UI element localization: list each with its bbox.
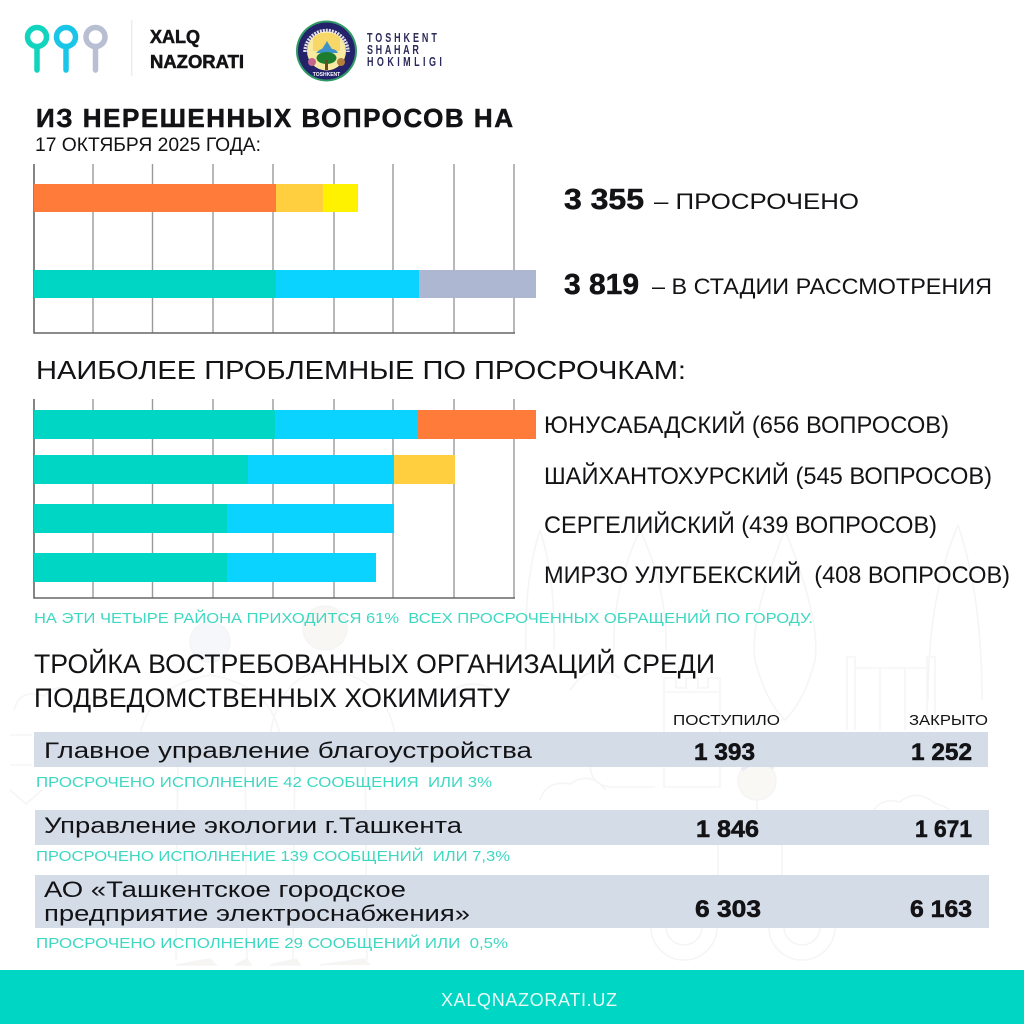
title <box>35 103 513 156</box>
city administration name: HOKIMLIGI <box>367 56 442 69</box>
district labels: ЮНУСАБАДСКИЙ (656 ВОПРОСОВ) <box>544 411 949 439</box>
district labels <box>544 411 1010 589</box>
brand name: NAZORATI <box>150 52 244 72</box>
background illustration <box>10 525 982 965</box>
bar: Mirzo Ulugbek <box>34 553 376 582</box>
title: ИЗ НЕРЕШЕННЫХ ВОПРОСОВ НА <box>36 103 513 133</box>
overdue note: row 3: ПРОСРОЧЕНО ИСПОЛНЕНИЕ 29 СООБЩЕНИЙ ИЛИ 0,5% <box>36 934 508 952</box>
table row: power supply enterprise <box>35 875 989 928</box>
bar: under review <box>34 270 536 298</box>
table column headers <box>673 712 988 729</box>
table row: ecology department: 1 846 <box>696 816 759 843</box>
heading: top three organizations <box>34 648 715 713</box>
table row: improvement department: Главное управление благоустройства <box>44 738 533 763</box>
bar: Sergeli <box>34 504 394 533</box>
district labels: МИРЗО УЛУГБЕКСКИЙ (408 ВОПРОСОВ) <box>544 561 1010 589</box>
city administration name: SHAHAR <box>367 44 419 57</box>
footer band <box>0 970 1024 1024</box>
footer band: XALQNAZORATI.UZ <box>441 990 617 1010</box>
heading: most problematic: НАИБОЛЕЕ ПРОБЛЕМНЫЕ ПО ПРОСРОЧКАМ: <box>36 355 686 385</box>
icon: grey magnifier <box>86 28 105 70</box>
under review total: 3 819 <box>564 269 639 301</box>
heading: top three organizations: ТРОЙКА ВОСТРЕБОВАННЫХ ОРГАНИЗАЦИЙ СРЕДИ <box>34 648 715 679</box>
table column headers: ЗАКРЫТО <box>909 712 988 729</box>
chart: overdue vs under review <box>34 164 536 333</box>
icon: blue magnifier <box>56 28 76 70</box>
table column headers: ПОСТУПИЛО <box>673 712 780 729</box>
overdue total <box>564 184 859 216</box>
city administration name <box>367 32 442 69</box>
under review total: – В СТАДИИ РАССМОТРЕНИЯ <box>652 274 992 299</box>
under review total <box>564 269 992 301</box>
bar: Yunusabad <box>34 410 536 439</box>
emblem: TOSHKENT <box>313 72 340 78</box>
chart: districts <box>34 399 536 598</box>
district labels: СЕРГЕЛИЙСКИЙ (439 ВОПРОСОВ) <box>544 511 937 539</box>
heading: top three organizations: ПОДВЕДОМСТВЕННЫХ ХОКИМИЯТУ <box>34 683 511 713</box>
brand name <box>150 27 244 72</box>
note: four districts share: НА ЭТИ ЧЕТЫРЕ РАЙОНА ПРИХОДИТСЯ 61% ВСЕХ ПРОСРОЧЕННЫХ ОБРАЩЕНИЙ ПО ГОРОДУ. <box>34 609 813 627</box>
table row: improvement department <box>34 732 988 767</box>
table row: ecology department: Управление экологии г.Ташкента <box>44 813 463 838</box>
table row: power supply enterprise: предприятие электроснабжения» <box>44 901 470 926</box>
overdue total: – ПРОСРОЧЕНО <box>654 189 859 214</box>
table row: ecology department: 1 671 <box>915 816 972 843</box>
table row: power supply enterprise: АО «Ташкентское городское <box>44 877 406 902</box>
table row: improvement department: 1 393 <box>694 739 755 766</box>
table row: improvement department: 1 252 <box>911 739 972 766</box>
district labels: ШАЙХАНТОХУРСКИЙ (545 ВОПРОСОВ) <box>544 462 992 490</box>
table row: ecology department <box>35 810 989 845</box>
overdue note: row 2: ПРОСРОЧЕНО ИСПОЛНЕНИЕ 139 СООБЩЕНИЙ ИЛИ 7,3% <box>36 847 510 865</box>
emblem <box>296 20 357 82</box>
brand name: XALQ <box>150 27 200 47</box>
header logos <box>28 20 442 82</box>
bar: overdue <box>34 184 358 212</box>
city administration name: TOSHKENT <box>367 32 437 45</box>
table row: power supply enterprise: 6 303 <box>695 896 761 923</box>
overdue note: row 1: ПРОСРОЧЕНО ИСПОЛНЕНИЕ 42 СООБЩЕНИЯ ИЛИ 3% <box>36 774 492 791</box>
table row: power supply enterprise: 6 163 <box>910 896 972 923</box>
title: 17 ОКТЯБРЯ 2025 ГОДА: <box>35 135 261 156</box>
bar: Shaykhantokhur <box>34 455 455 484</box>
overdue total: 3 355 <box>564 184 644 216</box>
icon: teal magnifier <box>28 28 46 70</box>
